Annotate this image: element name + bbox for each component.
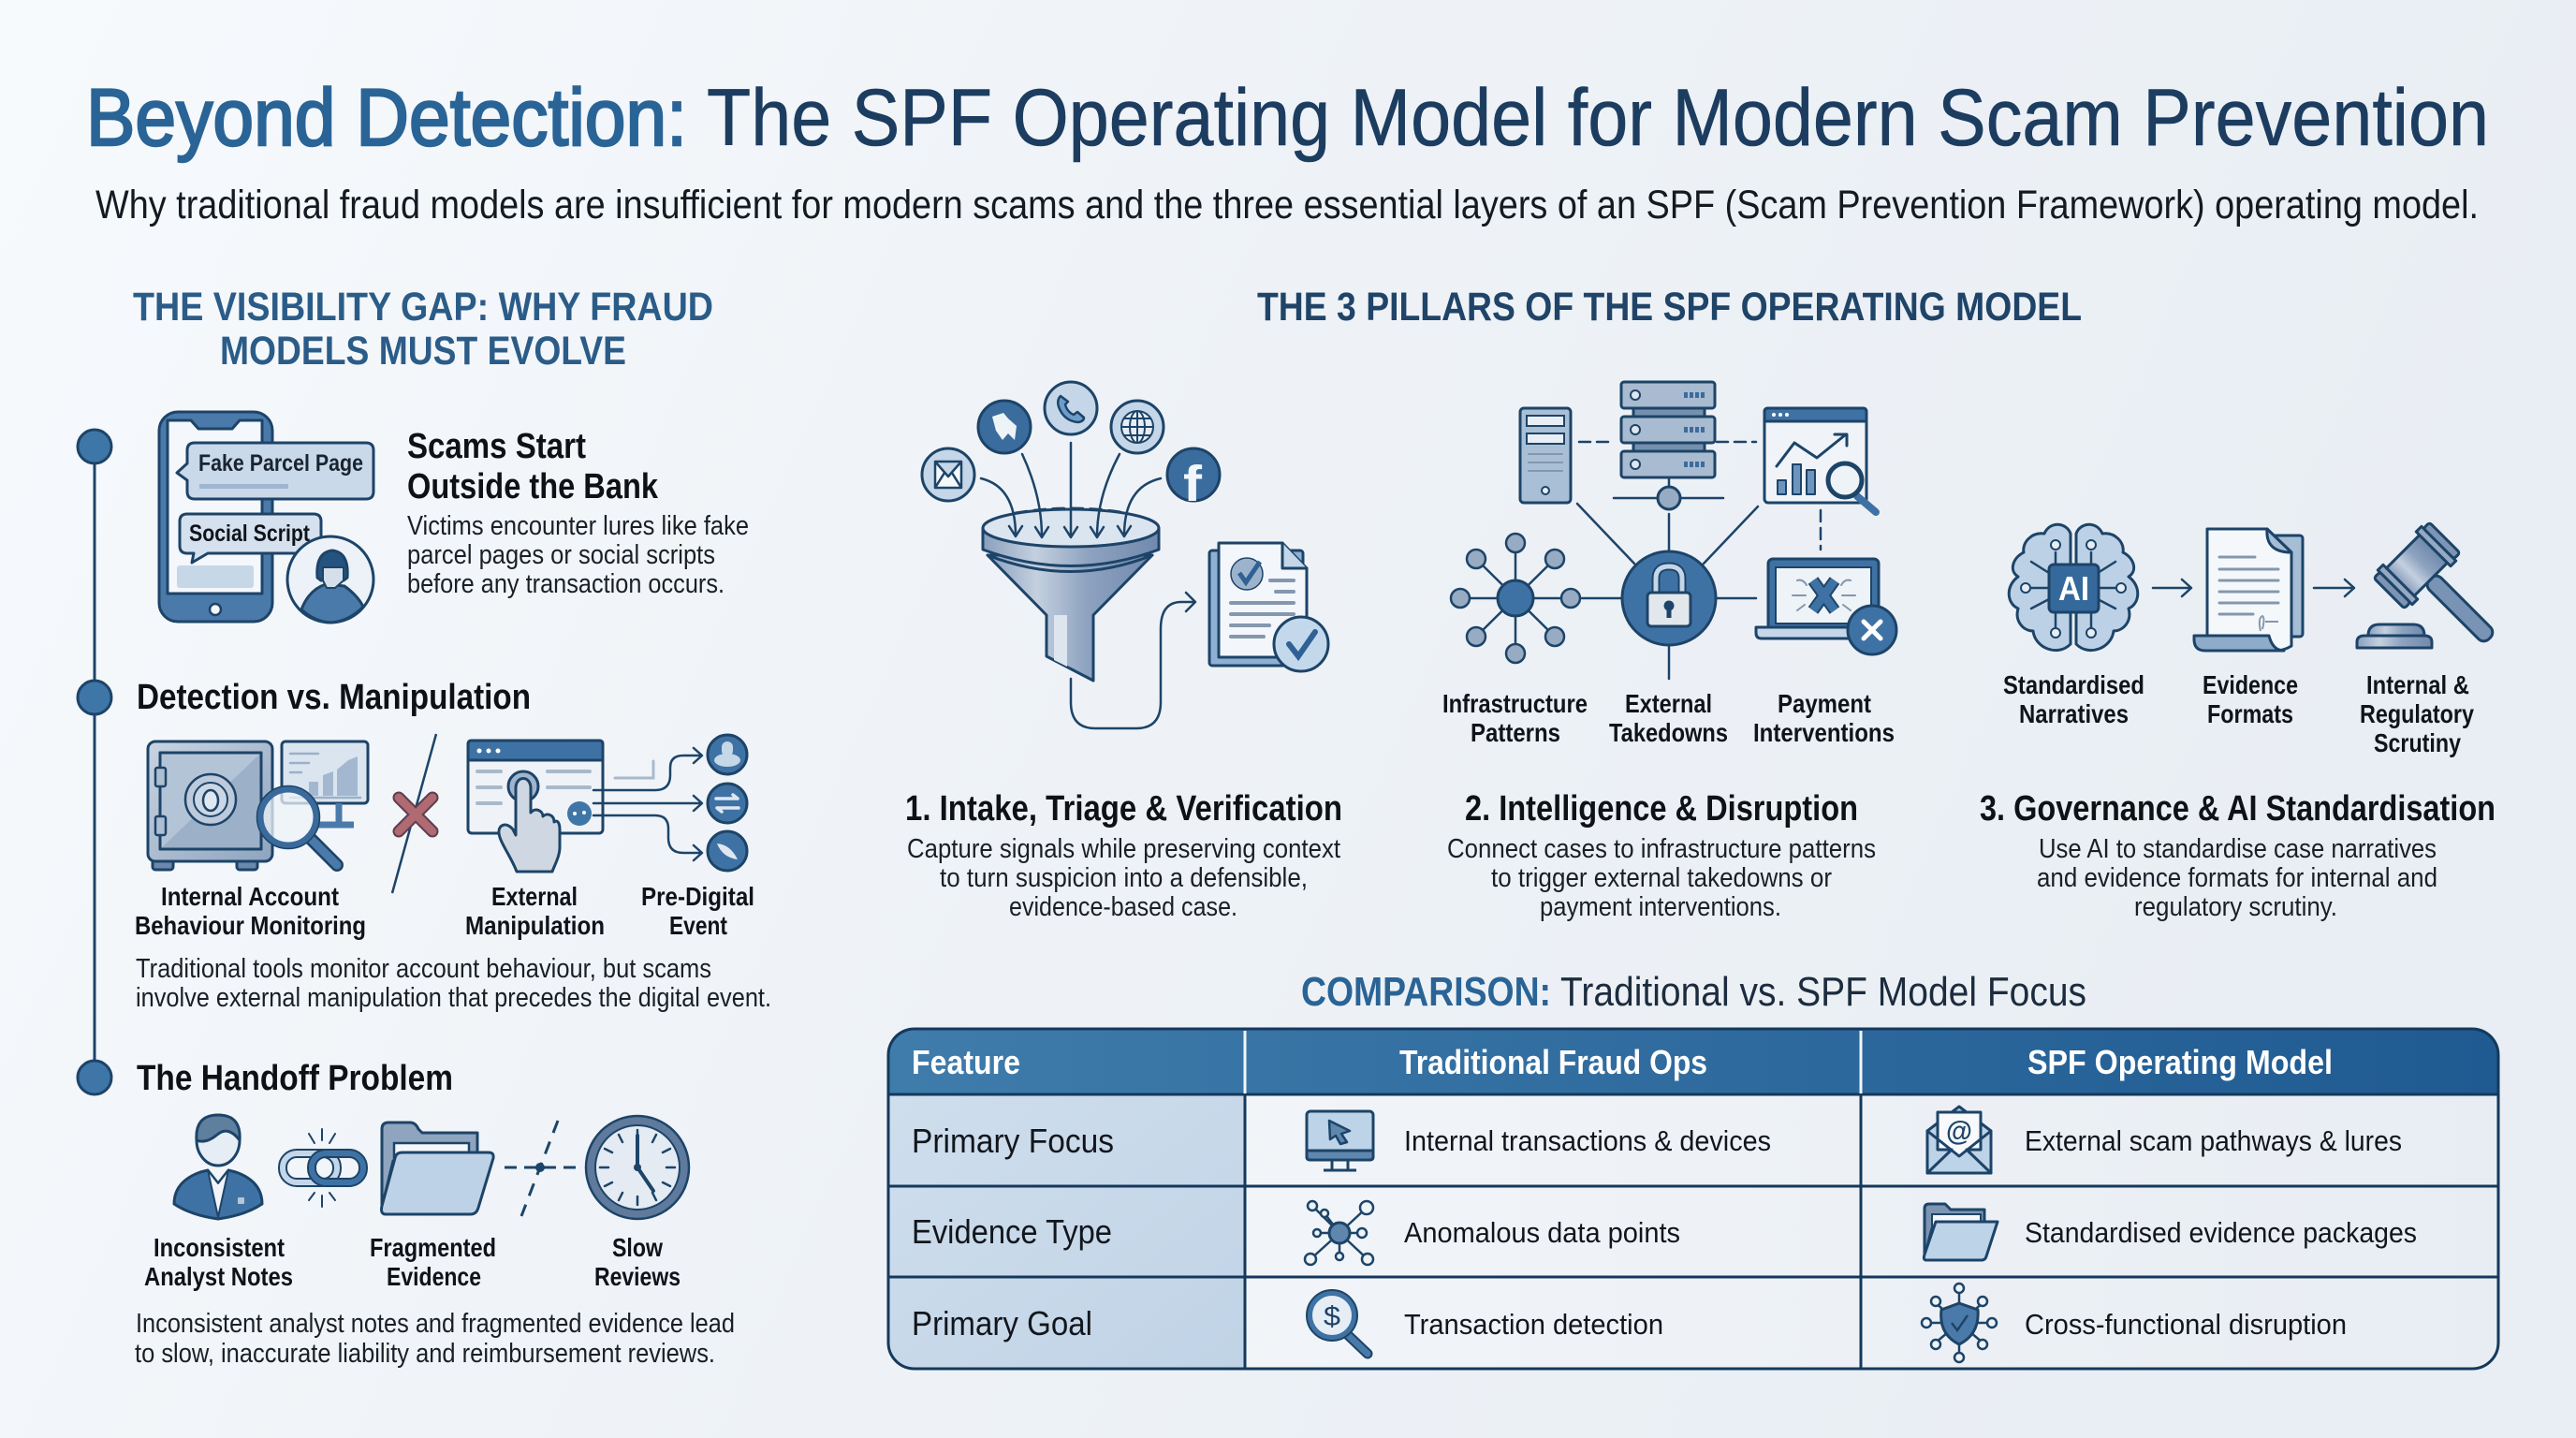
table header xyxy=(888,1029,2498,1094)
arrow: narratives to evidence xyxy=(2153,580,2191,596)
header row labels: Traditional Fraud Ops xyxy=(1399,1043,1707,1081)
row: primary goal xyxy=(912,1284,2347,1362)
row: primary focus xyxy=(912,1107,2402,1173)
arrows: inputs into funnel xyxy=(981,443,1161,537)
text: detection vs manipulation description: Traditional tools monitor account behaviour, but scams xyxy=(136,954,711,984)
panel heading: visibility gap xyxy=(133,285,713,374)
panel heading: 3 pillars: THE 3 PILLARS OF THE SPF OPERATING MODEL xyxy=(1257,285,2082,330)
pillar 1: intake, triage and verification xyxy=(905,382,1342,922)
labels: detection vs manipulation icons: Manipulation xyxy=(465,911,605,940)
icon: open folder xyxy=(382,1123,493,1214)
icon: detection versus manipulation mismatch xyxy=(392,734,436,893)
icon: funnel xyxy=(983,508,1159,681)
labels: detection vs manipulation icons: Internal Account xyxy=(161,882,339,911)
comparison table xyxy=(888,1029,2498,1369)
arrow: funnel to case document xyxy=(1071,593,1195,728)
icon: phone with lures: Social Script xyxy=(189,521,311,547)
text: pillar 1 description: to turn suspicion into a defensible, xyxy=(940,863,1308,893)
row: primary goal: Cross-functional disruption xyxy=(2025,1308,2347,1341)
labels: handoff problem icons xyxy=(144,1233,681,1291)
icon: AI brain xyxy=(2009,524,2138,651)
labels: pillar 2 icons xyxy=(1442,689,1895,747)
labels: pillar 2 icons: External xyxy=(1625,689,1712,718)
panel heading: visibility gap: THE VISIBILITY GAP: WHY FRAUD xyxy=(133,285,713,330)
icon: laptop with blocked payment xyxy=(1756,559,1896,654)
text: pillar 2 description xyxy=(1447,834,1876,922)
text: handoff problem description xyxy=(135,1309,735,1369)
labels: handoff problem icons: Slow xyxy=(612,1233,663,1262)
text: handoff problem description: Inconsistent analyst notes and fragmented evidence lead xyxy=(136,1309,735,1339)
icon: folder xyxy=(1924,1204,1998,1260)
icon: safe, monitor and magnifier xyxy=(148,741,368,870)
labels: detection vs manipulation icons: Behaviour Monitoring xyxy=(135,911,366,940)
arrows: manipulation to pre-digital events xyxy=(593,748,702,860)
text: scams start description: parcel pages or social scripts xyxy=(407,540,715,570)
icon: AI brain: AI xyxy=(2058,569,2089,608)
icon: magnifier with dollar xyxy=(1307,1290,1368,1354)
icon: open envelope with at sign xyxy=(1927,1107,1991,1173)
text: scams start description: before any transaction occurs. xyxy=(407,569,724,599)
labels: pillar 2 icons: Payment xyxy=(1778,689,1871,718)
labels: handoff problem icons: Inconsistent xyxy=(154,1233,285,1262)
labels: detection vs manipulation icons: External xyxy=(491,882,578,911)
heading: detection vs manipulation: Detection vs. Manipulation xyxy=(137,678,531,717)
row: primary focus: Primary Focus xyxy=(912,1122,1114,1160)
labels: pillar 3 icons: Regulatory xyxy=(2360,699,2474,728)
row: evidence type xyxy=(912,1201,2417,1265)
labels: pillar 3 icons: Internal & xyxy=(2366,670,2469,699)
labels: detection vs manipulation icons: Pre-Digital xyxy=(641,882,754,911)
labels: pillar 3 icons xyxy=(2003,670,2474,757)
connectors: infrastructure network xyxy=(1577,442,1821,679)
row: primary focus: External scam pathways & lures xyxy=(2025,1124,2402,1157)
icon: phone circle xyxy=(1045,382,1097,434)
heading: the handoff problem: The Handoff Problem xyxy=(137,1059,453,1098)
text: pillar 2 description: Connect cases to infrastructure patterns xyxy=(1447,834,1876,864)
labels: handoff problem icons: Evidence xyxy=(387,1262,481,1291)
pillar 3: governance and AI standardisation xyxy=(1980,521,2517,922)
icon: browser with pointing hand xyxy=(468,741,653,872)
heading: pillar 3: 3. Governance & AI Standardisation xyxy=(1980,789,2496,829)
panel heading: visibility gap: MODELS MUST EVOLVE xyxy=(220,329,626,374)
panel: the visibility gap xyxy=(78,285,771,1369)
icon: globe circle xyxy=(1111,401,1164,453)
row: evidence type: Standardised evidence packages xyxy=(2025,1216,2417,1249)
timeline spine with three markers xyxy=(78,430,111,1094)
labels: detection vs manipulation icons xyxy=(135,882,754,940)
header row labels xyxy=(912,1043,2333,1081)
icon: verified case document xyxy=(1209,543,1328,671)
title: Beyond Detection: xyxy=(86,73,687,163)
heading: pillar 2: 2. Intelligence & Disruption xyxy=(1465,789,1858,829)
icon: padlock xyxy=(1622,551,1716,645)
icon: dashed break xyxy=(505,1121,577,1216)
row: evidence type: Anomalous data points xyxy=(1404,1216,1680,1249)
icon: monitor with cursor xyxy=(1307,1111,1373,1170)
icon: broken chain link xyxy=(283,1129,363,1207)
header row labels: SPF Operating Model xyxy=(2027,1043,2333,1081)
row: primary focus: Internal transactions & devices xyxy=(1404,1124,1771,1157)
text: handoff problem description: to slow, inaccurate liability and reimbursement reviews. xyxy=(135,1339,715,1369)
heading: comparison: Traditional vs. SPF Model Focus xyxy=(1560,969,2086,1015)
arrow: evidence to scrutiny xyxy=(2314,580,2354,596)
icon: evidence document xyxy=(2194,529,2303,651)
icon: shield with network nodes xyxy=(1922,1284,1997,1362)
labels: pillar 3 icons: Evidence xyxy=(2203,670,2298,699)
text: pillar 3 description: Use AI to standardise case narratives xyxy=(2039,834,2437,864)
row: evidence type: Evidence Type xyxy=(912,1212,1112,1251)
labels: detection vs manipulation icons: Event xyxy=(669,911,727,940)
labels: pillar 2 icons: Infrastructure xyxy=(1442,689,1588,718)
icon: open envelope with at sign: @ xyxy=(1946,1116,1972,1147)
text: pillar 3 description: regulatory scrutiny. xyxy=(2134,892,2337,922)
icon: person circle xyxy=(708,735,747,774)
text: pillar 3 description: and evidence formats for internal and xyxy=(2037,863,2437,893)
icon: phone with lures xyxy=(159,412,373,623)
pillar 2: intelligence and disruption xyxy=(1442,382,1896,922)
text: scams start description xyxy=(407,511,749,599)
labels: pillar 3 icons: Standardised xyxy=(2003,670,2144,699)
first column xyxy=(888,1094,1245,1369)
table grid xyxy=(888,1029,2498,1369)
table body xyxy=(888,1029,2498,1369)
icon: transfer circle xyxy=(708,784,747,823)
text: pillar 2 description: to trigger external takedowns or xyxy=(1491,863,1832,893)
icon: mail circle xyxy=(922,448,974,501)
icon: magnifier with dollar: $ xyxy=(1324,1301,1340,1332)
row: primary goal: Primary Goal xyxy=(912,1304,1092,1343)
heading: scams start outside the bank xyxy=(407,427,659,506)
labels: pillar 2 icons: Takedowns xyxy=(1609,718,1728,747)
icon: wrench circle xyxy=(708,831,747,871)
icon: clock xyxy=(586,1116,689,1219)
icon: stacked servers xyxy=(1621,382,1715,509)
icon: social circle xyxy=(1167,448,1220,512)
heading: scams start outside the bank: Scams Start xyxy=(407,427,586,466)
text: scams start description: Victims encounter lures like fake xyxy=(407,511,749,541)
icon: tower server xyxy=(1520,408,1571,503)
heading: pillar 1: 1. Intake, Triage & Verification xyxy=(905,789,1342,829)
labels: pillar 3 icons: Narratives xyxy=(2019,699,2129,728)
icon: analytics window xyxy=(1764,408,1876,512)
panel: the 3 pillars xyxy=(905,285,2517,922)
text: pillar 2 description: payment interventions. xyxy=(1540,892,1781,922)
labels: pillar 2 icons: Interventions xyxy=(1753,718,1895,747)
text: pillar 3 description xyxy=(2037,834,2437,922)
icon: anomalous data nodes xyxy=(1305,1201,1373,1265)
icon: map circle xyxy=(978,401,1031,453)
labels: handoff problem icons: Analyst Notes xyxy=(144,1262,293,1291)
labels: pillar 3 icons: Scrutiny xyxy=(2374,728,2461,757)
heading: scams start outside the bank: Outside the Bank xyxy=(407,467,659,506)
icon: gavel xyxy=(2357,521,2517,666)
row: primary goal: Transaction detection xyxy=(1404,1308,1663,1341)
icon: phone with lures: Fake Parcel Page xyxy=(198,450,363,477)
icon: social circle: f xyxy=(1183,456,1203,512)
labels: pillar 3 icons: Formats xyxy=(2207,699,2293,728)
icon: infrastructure hub xyxy=(1451,534,1580,663)
text: detection vs manipulation description xyxy=(136,954,771,1013)
text: pillar 1 description: evidence-based case. xyxy=(1009,892,1237,922)
heading: comparison: COMPARISON: xyxy=(1301,969,1551,1015)
labels: handoff problem icons: Reviews xyxy=(594,1262,681,1291)
icon: analyst person xyxy=(174,1115,262,1219)
labels: pillar 2 icons: Patterns xyxy=(1471,718,1560,747)
text: pillar 1 description: Capture signals while preserving context xyxy=(907,834,1340,864)
header row labels: Feature xyxy=(912,1043,1020,1081)
heading: comparison xyxy=(1301,969,2086,1015)
text: pillar 1 description xyxy=(907,834,1340,922)
text: detection vs manipulation description: involve external manipulation that precedes the digital event. xyxy=(136,983,771,1013)
labels: handoff problem icons: Fragmented xyxy=(370,1233,496,1262)
